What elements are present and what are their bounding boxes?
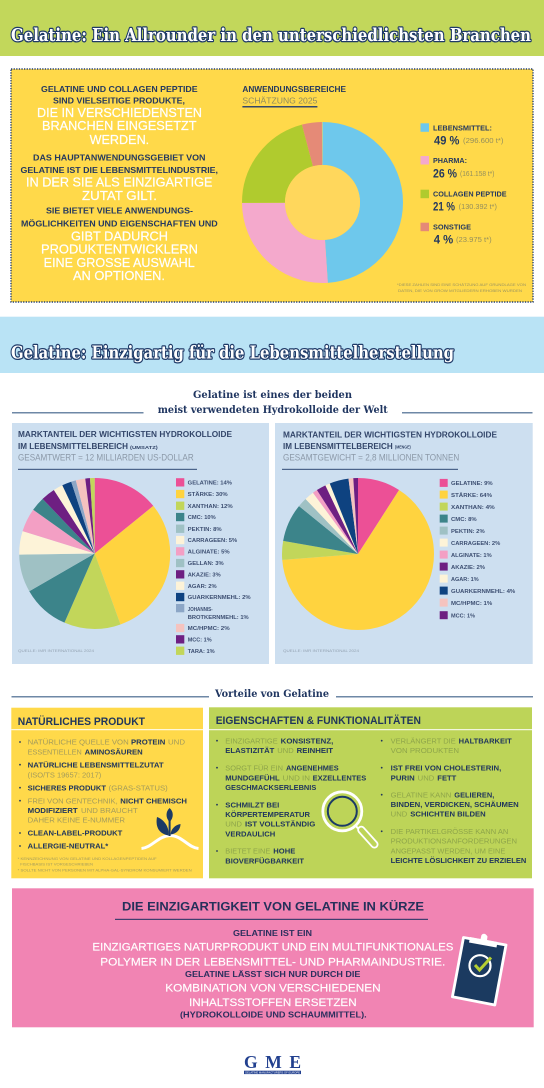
donut legend: 4 %	[434, 234, 453, 246]
donut legend: (161.158 t*)	[460, 171, 494, 178]
panel heading	[18, 429, 232, 470]
source: volume: QUELLE: IMR INTERNATIONAL 2024	[283, 649, 359, 653]
panel heading: (MENGE)	[395, 445, 411, 450]
bullet list: right column: VERLÄNGERT DIE	[391, 736, 456, 745]
pie legend: volume: PEKTIN: 2%	[451, 529, 485, 535]
panel heading: NATÜRLICHES PRODUKT	[18, 715, 146, 728]
summary text	[92, 929, 453, 1020]
pie legend: volume: MC/HPMC: 1%	[451, 601, 492, 607]
panel: summary	[12, 888, 534, 1027]
source: revenue: QUELLE: IMR INTERNATIONAL 2024	[18, 649, 94, 653]
donut legend: (23.975 t*)	[456, 237, 492, 244]
pie legend: volume: CMC: 8%	[451, 517, 477, 523]
pie legend: volume: MCC: 1%	[451, 613, 475, 619]
summary text: GELATINE LÄSST SICH NUR DURCH DIE	[185, 970, 360, 979]
bullet list: right column: PURIN	[391, 773, 415, 782]
bullet list: UND	[168, 738, 185, 747]
pie legend: volume: CARRAGEEN: 2%	[451, 541, 500, 547]
intro text block: GELATINE UND COLLAGEN PEPTIDE	[41, 85, 198, 94]
bullet list: NICHT CHEMISCH	[120, 796, 187, 805]
panel heading: MARKTANTEIL DER WICHTIGSTEN HYDROKOLLOIDE	[18, 429, 232, 439]
bullet list: right column: UND	[418, 773, 434, 782]
pie legend: revenue: TARA: 1%	[188, 649, 215, 655]
bullet list: AMINOSÄUREN	[85, 747, 143, 756]
pie legend: revenue: STÄRKE: 30%	[188, 491, 228, 498]
bullet list: right column: PRODUKTIONSANFORDERUNGEN	[391, 837, 517, 846]
heading: hydrocolloids: Gelatine ist eines der beiden	[193, 390, 353, 401]
logo: GME: GME	[244, 1052, 301, 1072]
panel: market share by volume	[275, 423, 533, 664]
panel heading: GESAMTWERT = 12 MILLIARDEN US-DOLLAR	[18, 451, 194, 462]
bullet list: left column: REINHEIT	[297, 746, 334, 755]
bullet list: left column: EINZIGARTIGE	[225, 736, 278, 745]
panel heading: (UMSATZ)	[130, 445, 158, 450]
bullet list: right column: DIE PARTIKELGRÖSSE KANN AN	[391, 827, 508, 836]
pie legend: revenue: AKAZIE: 3%	[188, 572, 221, 578]
pie legend: revenue: CARRAGEEN: 5%	[188, 538, 237, 544]
bullet list: left column: HOHE	[273, 847, 296, 856]
bullet list: left column: BIETET EINE	[225, 847, 271, 856]
intro text block: BRANCHEN EINGESETZT	[42, 119, 197, 133]
bullet list: UND BRAUCHT	[81, 806, 138, 815]
bullet list: SICHERES PRODUKT	[28, 783, 107, 792]
bullet list: NATÜRLICHE LEBENSMITTELZUTAT	[28, 760, 164, 769]
summary text: KOMBINATION VON VERSCHIEDENEN	[165, 982, 381, 994]
pie chart: revenue	[57, 516, 132, 591]
title band: Allrounder	[0, 0, 544, 56]
panel heading: IM LEBENSMITTELBEREICH	[283, 441, 393, 451]
bullet list: left column: GESCHMACKSERLEBNIS	[225, 783, 317, 792]
panel: application areas	[11, 69, 533, 302]
bullet list: ALLERGIE-NEUTRAL*	[28, 842, 109, 851]
pie legend: volume	[440, 479, 515, 619]
bullet list: (GRAS-STATUS)	[109, 783, 168, 792]
bullet list: right column: HALTBARKEIT	[459, 736, 512, 745]
bullet list: left column	[216, 736, 366, 865]
bullet list: CLEAN-LABEL-PRODUKT	[28, 829, 123, 838]
summary heading: DIE EINZIGARTIGKEIT VON GELATINE IN KÜRZE	[122, 899, 424, 914]
bullet list: MODIFIZIERT	[28, 806, 78, 815]
summary text: INHALTSSTOFFEN ERSETZEN	[189, 997, 357, 1009]
bullet list: right column: FETT	[437, 773, 457, 782]
bullet list: left column: ELASTIZITÄT	[225, 746, 275, 755]
pie legend: revenue: BROTKERNMEHL: 1%	[188, 615, 249, 621]
bullet list: DAHER KEINE E-NUMMER	[28, 816, 125, 825]
donut legend: LEBENSMITTEL:	[433, 126, 492, 132]
bullet list: (ISO/TS 19657: 2017)	[28, 770, 101, 779]
pie legend: revenue: CMC: 10%	[188, 515, 216, 521]
pie legend: revenue: MCC: 1%	[188, 637, 212, 643]
summary text: POLYMER IN DER LEBENSMITTEL- UND PHARMAINDUSTRIE.	[100, 956, 445, 968]
intro text block: EINE GROSSE AUSWAHL	[44, 256, 195, 270]
bullet list: FREI VON GENTECHNIK,	[28, 796, 118, 805]
bullet list: left column: UND	[225, 820, 242, 829]
panel heading: GESAMTGEWICHT = 2,8 MILLIONEN TONNEN	[283, 452, 459, 463]
pie legend: volume: AKAZIE: 2%	[451, 565, 485, 571]
panel heading: EIGENSCHAFTEN & FUNKTIONALITÄTEN	[216, 714, 421, 727]
logo: GME: GELATINE MANUFACTURERS OF EUROPE	[245, 1071, 300, 1074]
bullet list: right column: BINDEN, VERDICKEN, SCHÄUMEN	[391, 800, 519, 809]
pie legend: revenue: PEKTIN: 8%	[188, 527, 222, 533]
bullet list: NATÜRLICHE QUELLE VON	[28, 738, 129, 747]
donut legend: (130.392 t*)	[459, 204, 497, 211]
donut legend: (296.600 t*)	[463, 138, 504, 145]
pie legend: volume: GUARKERNMEHL: 4%	[451, 589, 515, 595]
summary text: EINZIGARTIGES NATURPRODUKT UND EIN MULTIFUNKTIONALES	[92, 942, 453, 954]
pie legend: volume: XANTHAN: 4%	[451, 505, 495, 511]
bullet list: left column: IST VOLLSTÄNDIG	[245, 820, 316, 829]
intro text block: MÖGLICHKEITEN UND EIGENSCHAFTEN UND	[21, 219, 218, 229]
bullet list: right column: SCHICHTEN BILDEN	[410, 810, 486, 819]
summary text: (HYDROKOLLOIDE UND SCHAUMMITTEL).	[180, 1010, 367, 1020]
footnotes: * SOLLTE NICHT VON PERSONEN MIT ALPHA-GAL-SYNDROM KONSUMIERT WERDEN	[18, 869, 192, 873]
donut legend	[420, 123, 507, 246]
donut legend: PHARMA:	[433, 158, 467, 165]
panel heading: MARKTANTEIL DER WICHTIGSTEN HYDROKOLLOIDE	[283, 430, 497, 440]
intro text block: ZUTAT GILT.	[82, 189, 157, 203]
pie legend: revenue: GELLAN: 3%	[188, 561, 224, 567]
summary text: GELATINE IST EIN	[233, 929, 312, 938]
pie legend: revenue: ALGINATE: 5%	[188, 549, 230, 555]
panel: natural product	[11, 708, 203, 878]
pie legend: revenue: JOHANNIS-	[188, 607, 213, 613]
bullet list: right column	[381, 736, 526, 865]
bullet list: right column: GELIEREN,	[454, 790, 494, 799]
bullet list: left column: SCHMILZT BEI	[225, 800, 279, 809]
intro text block: AN OPTIONEN.	[73, 269, 165, 283]
intro text block: IN DER SIE ALS EINZIGARTIGE	[26, 176, 212, 190]
bullet list: ESSENTIELLEN	[28, 747, 82, 756]
bullet list: left column: UND IN	[283, 773, 310, 782]
heading: hydrocolloids: meist verwendeten Hydrokolloide der Welt	[158, 405, 388, 416]
panel: properties and functionalities	[209, 707, 532, 878]
pie legend: revenue: AGAR: 2%	[188, 584, 217, 590]
donut legend: 49 %	[434, 136, 459, 148]
bullet list: left column: MUNDGEFÜHL	[225, 773, 280, 782]
donut chart	[264, 144, 382, 262]
pie legend: revenue	[176, 478, 251, 655]
bullet list: PROTEIN	[131, 738, 165, 747]
bullet list: left column: UND	[277, 746, 294, 755]
bullet list: right column: IST FREI VON CHOLESTERIN,	[391, 763, 501, 772]
donut legend: 26 %	[433, 168, 457, 180]
donut legend: SONSTIGE	[433, 224, 471, 232]
icon: magnifying glass	[323, 792, 379, 849]
intro text block: WERDEN.	[90, 133, 149, 147]
bullet list: left column: VERDAULICH	[225, 829, 275, 838]
bullet list: right column: LEICHTE LÖSLICHKEIT ZU ERZIELEN	[391, 856, 526, 865]
pie legend: volume: GELATINE: 9%	[451, 481, 493, 487]
pie legend: volume: STÄRKE: 64%	[451, 492, 492, 499]
bullet list: right column: ANGEPASST WERDEN, UM EINE	[391, 846, 506, 855]
footnotes	[18, 857, 192, 873]
footnotes: * KENNZEICHNUNG VON GELATINE UND KOLLAGENPEPTIDEN AUF	[18, 857, 157, 861]
section band: Einzigartig	[0, 317, 544, 373]
chart heading: ANWENDUNGSBEREICHE	[242, 85, 347, 94]
pie chart: volume	[320, 516, 396, 592]
bullet list: left column: BIOVERFÜGBARKEIT	[225, 856, 305, 865]
chart heading	[242, 85, 347, 108]
bullet list: right column: UND	[391, 810, 407, 819]
bullet list: left column: SORGT FÜR EIN	[225, 763, 283, 772]
intro text block	[20, 85, 218, 283]
pie legend: revenue: GELATINE: 14%	[188, 480, 232, 486]
icon: clipboard with check	[452, 934, 506, 1005]
pie legend: revenue: XANTHAN: 12%	[188, 504, 233, 510]
bullet list: left column: KÖRPERTEMPERATUR	[225, 810, 311, 819]
bullet list: left column: KONSISTENZ,	[281, 736, 333, 745]
intro text block: DIE IN VERSCHIEDENSTEN	[37, 106, 202, 120]
donut footnote	[397, 283, 527, 293]
heading: Vorteile von Gelatine: Vorteile von Gelatine	[214, 689, 329, 700]
pie legend: revenue: GUARKERNMEHL: 2%	[188, 595, 251, 601]
panel heading	[282, 430, 497, 470]
donut legend: 21 %	[433, 201, 455, 213]
bullet list: left column: EXZELLENTES	[313, 773, 366, 782]
intro text block: GIBT DADURCH	[71, 230, 168, 244]
heading: hydrocolloids	[12, 390, 532, 416]
intro text block: SIE BIETET VIELE ANWENDUNGS-	[46, 206, 193, 215]
bullet list: right column: GELATINE KANN	[391, 790, 451, 799]
intro text block: DAS HAUPTANWENDUNGSGEBIET VON	[33, 154, 206, 163]
section title: Gelatine: Einzigartig für die Lebensmittelherstellung	[11, 342, 454, 364]
footnotes: FISCHBASIS IST VORGESCHRIEBEN	[20, 862, 94, 866]
pie legend: revenue: MC/HPMC: 2%	[188, 626, 230, 632]
intro text block: SIND VIELSEITIGE PRODUKTE,	[53, 96, 185, 105]
intro text block: PRODUKTENTWICKLERN	[41, 242, 198, 256]
donut legend: COLLAGEN PEPTIDE	[433, 192, 507, 198]
chart heading: SCHÄTZUNG 2025	[242, 96, 318, 106]
pie legend: volume: AGAR: 1%	[451, 577, 479, 583]
icon: plant on hill	[142, 808, 198, 848]
pie legend: volume: ALGINATE: 1%	[451, 553, 492, 559]
panel heading: IM LEBENSMITTELBEREICH	[18, 441, 128, 451]
intro text block: GELATINE IST DIE LEBENSMITTELINDUSTRIE,	[20, 166, 218, 175]
donut footnote: DATEN, DIE VON GROW MITGLIEDERN ERHOBEN WURDEN	[398, 289, 523, 293]
donut footnote: *DIESE ZAHLEN SIND EINE SCHÄTZUNG AUF GRUNDLAGE VON	[397, 283, 527, 287]
panel: market share by revenue	[12, 423, 269, 664]
bullet list: left column: ANGENEHMES	[286, 763, 339, 772]
bullet list: right column: VON PRODUKTEN	[391, 746, 459, 755]
bullet list	[19, 738, 187, 851]
